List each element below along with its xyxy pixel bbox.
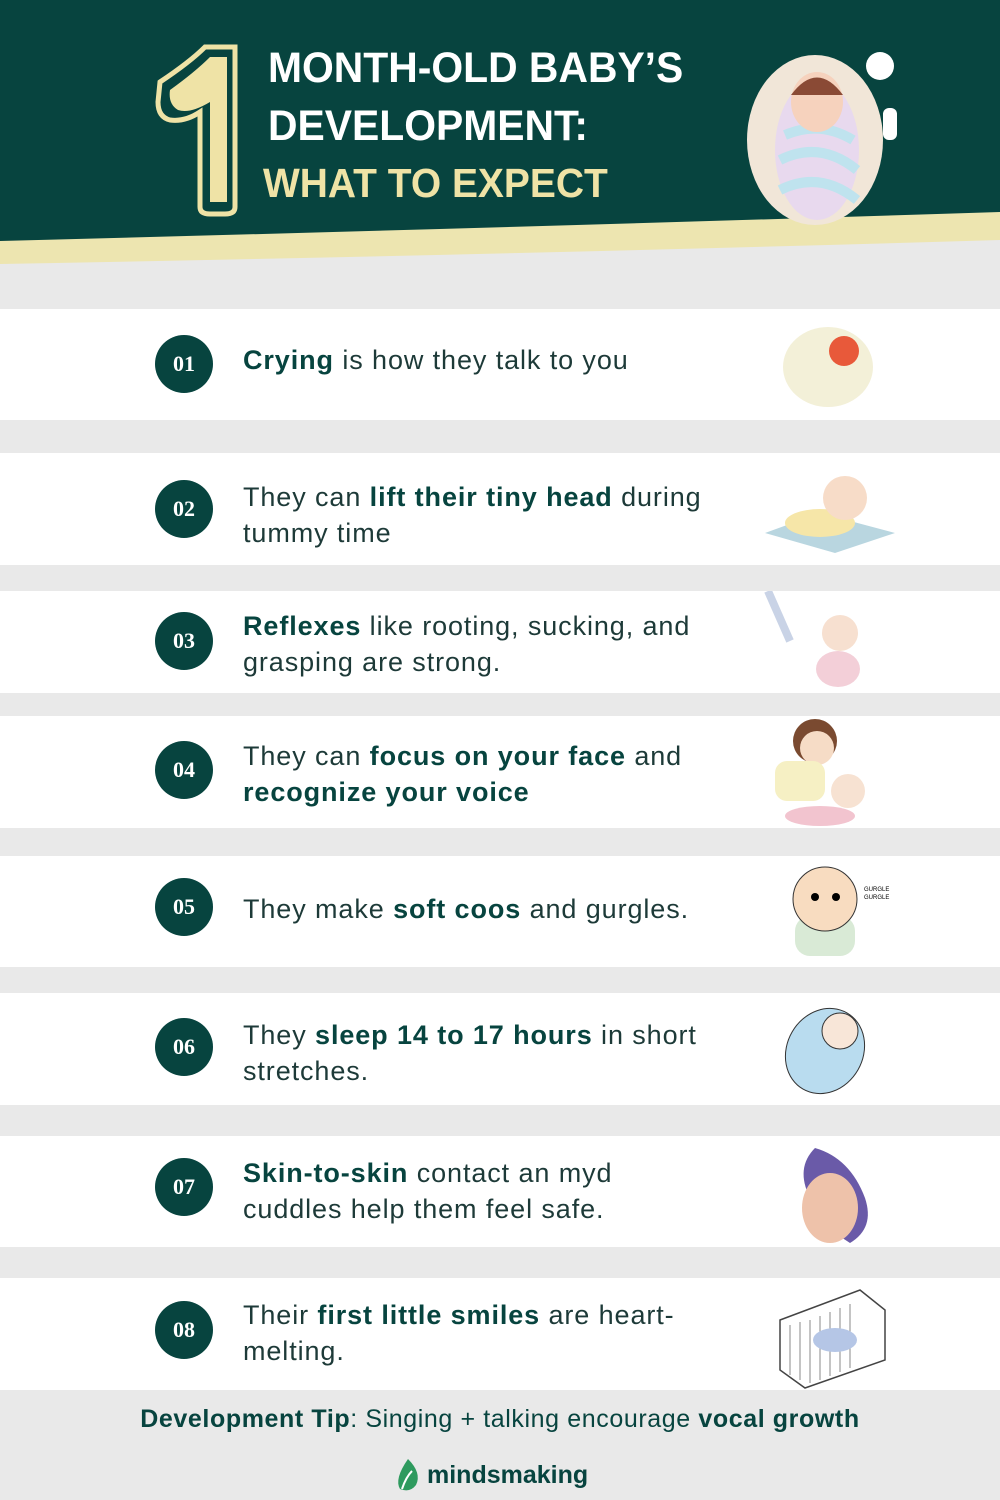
row 05: 05	[173, 894, 195, 919]
row 03: 03	[173, 628, 195, 653]
row 06: They sleep 14 to 17 hours in short stretches.	[243, 1020, 697, 1086]
icon: parent and baby	[775, 719, 865, 826]
row 07	[0, 1136, 1000, 1247]
row 01: Crying is how they talk to you	[243, 345, 629, 375]
row 06: 06	[173, 1034, 195, 1059]
header: WHAT TO EXPECT	[263, 160, 608, 206]
icon: crib	[779, 1289, 886, 1389]
row 04	[0, 716, 1000, 828]
row 01	[0, 309, 1000, 420]
row 05: They make soft coos and gurgles.	[243, 894, 689, 924]
row 08	[0, 1278, 1000, 1390]
development tip: Development Tip: Singing + talking encourage vocal growth	[140, 1405, 860, 1433]
header: MONTH-OLD BABY’S	[268, 44, 683, 92]
icon: sleeping baby	[784, 1008, 866, 1094]
icon: swaddled baby	[747, 52, 897, 225]
icon: tummy time	[765, 476, 895, 553]
row 02	[0, 453, 1000, 565]
header	[0, 0, 1000, 264]
row 02: 02	[173, 496, 195, 521]
icon: crying baby	[783, 327, 873, 407]
row 04: 04	[173, 757, 195, 782]
row 07: Skin-to-skin contact an myd cuddles help them feel safe.	[243, 1158, 612, 1224]
row 06	[0, 993, 1000, 1105]
row 07: 07	[173, 1174, 195, 1199]
title	[263, 44, 683, 206]
logo: mindsmaking: mindsmaking	[427, 1460, 588, 1488]
icon: cooing baby: GURGLE	[864, 887, 889, 893]
row 04: They can focus on your face and recognize your voice	[243, 741, 682, 807]
icon: cooing baby	[792, 866, 890, 956]
icon: grasping	[764, 591, 860, 687]
header: DEVELOPMENT:	[268, 102, 588, 150]
row 01: 01	[173, 351, 195, 376]
icon: mother cuddling	[802, 1148, 868, 1243]
row 03: Reflexes like rooting, sucking, and grasping are strong.	[243, 611, 690, 677]
row 03	[0, 591, 1000, 693]
icon: cooing baby: GURGLE	[864, 895, 889, 901]
big number 1	[156, 44, 238, 216]
row 02: They can lift their tiny head during tummy time	[243, 482, 702, 548]
row 05	[0, 856, 1000, 967]
row 08: Their first little smiles are heart-melting.	[243, 1300, 675, 1366]
row 08: 08	[173, 1317, 195, 1342]
